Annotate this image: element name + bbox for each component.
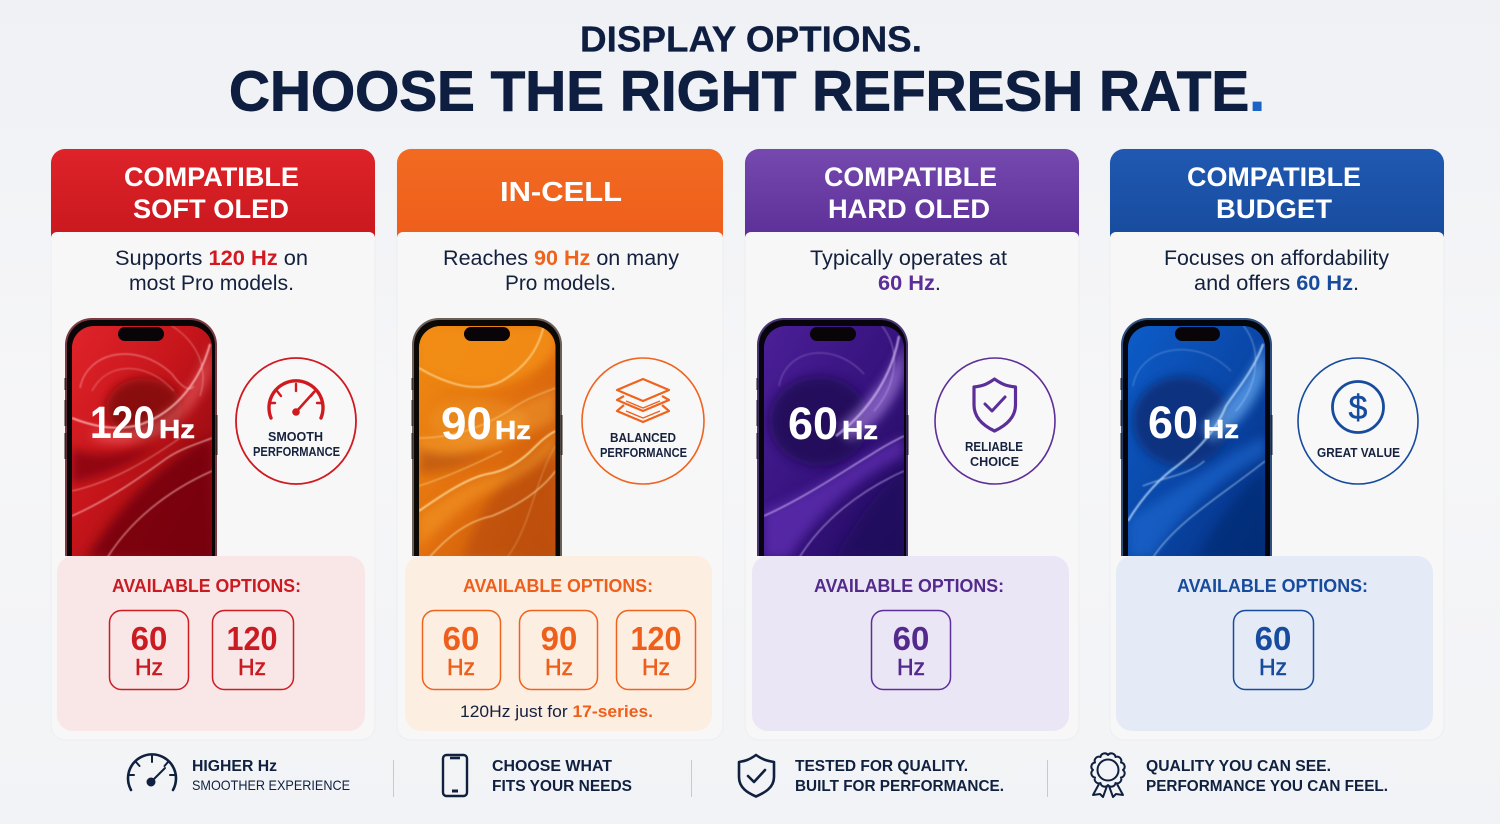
chip: 60 Hz: Hz	[897, 654, 925, 680]
text: choose what: CHOOSE WHAT	[492, 758, 613, 775]
header: budget: COMPATIBLE	[1187, 162, 1361, 192]
chip: 120 Hz: Hz	[238, 654, 266, 680]
phone: 90Hz: Hz	[495, 415, 531, 445]
chip: 90 Hz	[520, 610, 598, 690]
header: in-cell: IN-CELL	[500, 176, 622, 207]
header: hard OLED: COMPATIBLE	[824, 162, 997, 192]
phone: 90Hz	[412, 318, 562, 556]
phone: 60Hz blue: Hz	[1203, 414, 1239, 444]
options: hard OLED	[752, 556, 1069, 731]
text: tested for quality: BUILT FOR PERFORMANCE.	[795, 778, 1004, 795]
phone: 60Hz purple: 60	[788, 398, 838, 449]
chip: 60 Hz: Hz	[1259, 654, 1287, 680]
chip: 60 Hz: 60	[131, 620, 167, 657]
chip: 60 Hz	[1234, 610, 1314, 690]
chip: 120 Hz: 120	[226, 620, 278, 657]
title	[229, 18, 1265, 124]
header: hard OLED	[745, 149, 1079, 240]
phone: 120Hz: Hz	[159, 414, 195, 444]
chip: 60 Hz	[872, 610, 950, 690]
description: budget	[1164, 247, 1390, 295]
badge: smooth performance: SMOOTH	[268, 430, 323, 444]
header: soft OLED: SOFT OLED	[133, 194, 289, 224]
description: soft OLED: Supports 120 Hz on	[115, 247, 308, 270]
description: soft OLED	[115, 247, 308, 295]
description: hard OLED	[810, 247, 1007, 295]
badge: reliable choice	[935, 358, 1055, 484]
panel: in-cell	[397, 149, 723, 740]
icon: gauge	[269, 381, 323, 418]
badge: balanced performance	[582, 358, 704, 484]
icon: shield	[974, 379, 1016, 431]
chip: 60 Hz	[110, 610, 188, 690]
options: budget: AVAILABLE OPTIONS:	[1177, 575, 1368, 596]
phone: 90Hz: 90	[441, 398, 492, 449]
phone: 60Hz blue: 60	[1148, 397, 1198, 448]
description: budget: and offers 60 Hz.	[1194, 272, 1359, 295]
icon: footer gauge	[128, 754, 176, 790]
description: budget: Focuses on affordability	[1164, 247, 1390, 270]
badge: balanced performance: PERFORMANCE	[600, 446, 687, 460]
options: soft OLED	[57, 556, 365, 731]
badge: balanced performance: BALANCED	[610, 431, 676, 445]
header: hard OLED: HARD OLED	[828, 194, 990, 224]
description: hard OLED: Typically operates at	[810, 247, 1007, 270]
badge: reliable choice: CHOICE	[970, 455, 1019, 469]
panel: compatible soft OLED	[51, 149, 375, 740]
description: in-cell: Pro models.	[505, 272, 616, 295]
phone: 60Hz purple	[756, 318, 908, 556]
note: 17-series: 120Hz just for 17-series.	[460, 702, 653, 721]
chip: 60 Hz: 60	[443, 620, 479, 657]
phone: 60Hz blue	[1120, 318, 1272, 556]
title: CHOOSE THE RIGHT REFRESH RATE.	[229, 60, 1265, 124]
header: in-cell	[397, 149, 723, 240]
text: choose what: FITS YOUR NEEDS	[492, 778, 632, 795]
icon: footer shield	[739, 755, 774, 796]
badge: great value	[1298, 358, 1418, 484]
chip: 60 Hz: 60	[1255, 620, 1291, 657]
panel: compatible budget	[1110, 149, 1444, 740]
phone: 120Hz	[64, 318, 218, 556]
chip: 60 Hz: Hz	[135, 654, 163, 680]
text: higher Hz	[192, 758, 350, 793]
chip: 120 Hz	[212, 610, 294, 690]
text: higher Hz: SMOOTHER EXPERIENCE	[192, 777, 350, 793]
options: in-cell: AVAILABLE OPTIONS:	[463, 575, 653, 596]
header: soft OLED	[51, 149, 375, 240]
header: budget	[1110, 149, 1444, 240]
icon: footer phone	[443, 755, 467, 796]
text: choose what	[492, 758, 632, 795]
chip: 60 Hz	[422, 610, 500, 690]
text: quality you can see: QUALITY YOU CAN SEE.	[1146, 758, 1331, 775]
header: budget: BUDGET	[1216, 194, 1333, 224]
text: quality you can see	[1146, 758, 1388, 795]
title: DISPLAY OPTIONS.	[580, 18, 922, 60]
chip: 60 Hz: Hz	[447, 654, 475, 680]
chip: 60 Hz: 60	[893, 620, 929, 657]
description: soft OLED: most Pro models.	[129, 272, 294, 295]
chip: 90 Hz: 90	[541, 620, 577, 657]
icon: dollar: $	[1349, 389, 1368, 427]
description: hard OLED: 60 Hz.	[878, 272, 941, 295]
options: budget	[1116, 556, 1433, 731]
text: tested for quality	[795, 758, 1004, 795]
phone: 120Hz: 120	[90, 397, 155, 448]
chip: 120 Hz: 120	[630, 620, 682, 657]
text: quality you can see: PERFORMANCE YOU CAN FEEL.	[1146, 778, 1388, 795]
panel: compatible hard OLED	[745, 149, 1079, 740]
text: tested for quality: TESTED FOR QUALITY.	[795, 758, 968, 775]
options: in-cell	[405, 556, 712, 731]
description: in-cell	[443, 247, 680, 295]
icon: layers	[617, 379, 669, 422]
icon: footer award	[1091, 753, 1125, 797]
badge: great value: GREAT VALUE	[1317, 446, 1400, 460]
footer strip	[128, 753, 1388, 797]
badge: reliable choice: RELIABLE	[965, 440, 1023, 454]
phone: 60Hz purple: Hz	[842, 415, 878, 445]
chip: 120 Hz: Hz	[642, 654, 670, 680]
badge: smooth performance	[236, 358, 356, 484]
badge: smooth performance: PERFORMANCE	[253, 445, 340, 459]
chip: 120 Hz	[616, 610, 696, 690]
options: soft OLED: AVAILABLE OPTIONS:	[112, 575, 301, 596]
text: higher Hz: HIGHER Hz	[192, 758, 277, 775]
chip: 90 Hz: Hz	[545, 654, 573, 680]
options: hard OLED: AVAILABLE OPTIONS:	[814, 575, 1004, 596]
header: soft OLED: COMPATIBLE	[124, 162, 299, 192]
description: in-cell: Reaches 90 Hz on many	[443, 247, 680, 270]
